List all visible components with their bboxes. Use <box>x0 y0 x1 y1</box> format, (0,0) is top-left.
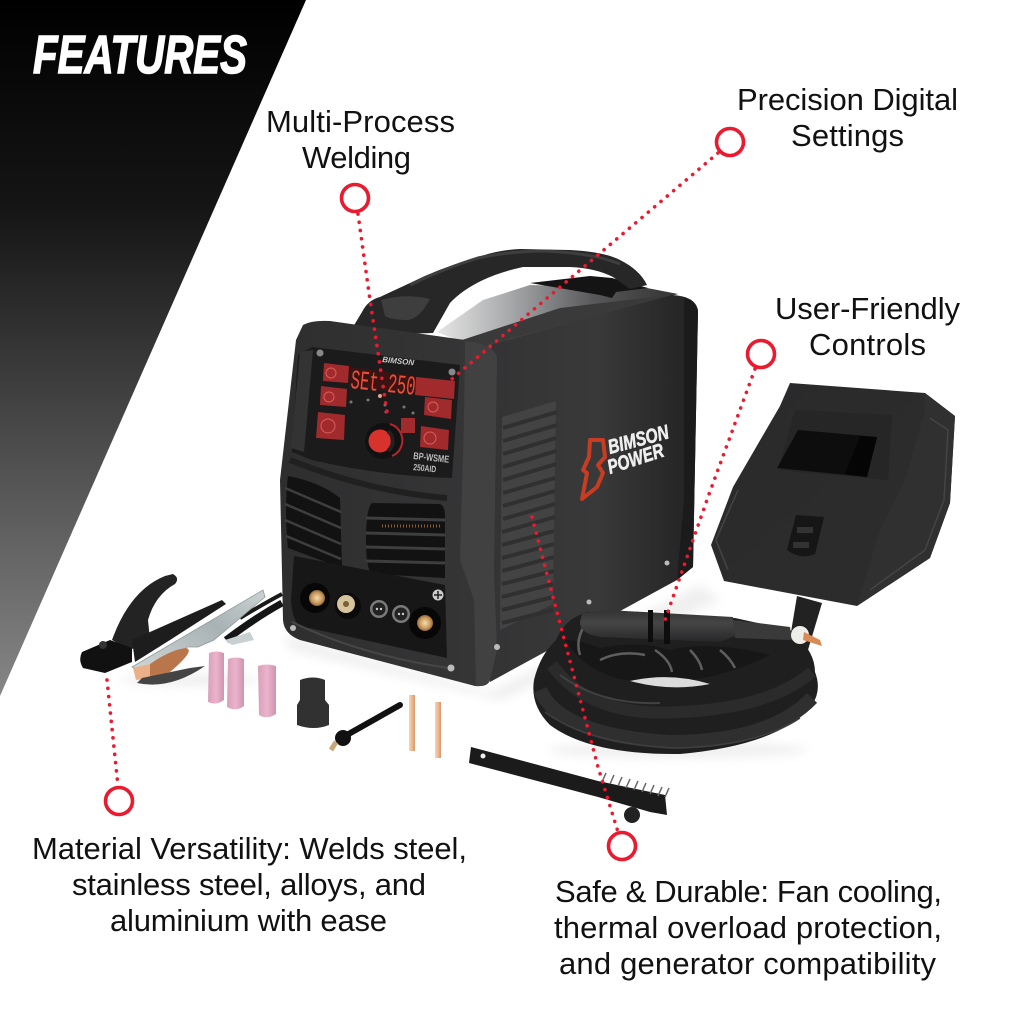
label: precision digital settings: Precision Digital <box>737 82 958 117</box>
model text <box>413 451 450 474</box>
marker: user controls <box>748 340 774 368</box>
label: multi-process welding: Multi-Process <box>266 104 455 139</box>
block icons <box>321 368 438 444</box>
marker: digital settings <box>716 128 744 156</box>
digital display <box>349 367 417 404</box>
copper collets <box>409 695 441 758</box>
helmet window <box>777 410 892 480</box>
model text: 250AID <box>413 462 437 474</box>
side panel <box>477 295 698 682</box>
rear clamp <box>530 276 648 298</box>
corner screws <box>290 560 670 672</box>
marker: multi-process <box>342 184 368 212</box>
floor shadows <box>120 585 808 758</box>
status leds <box>350 394 414 414</box>
welding machine <box>280 249 698 686</box>
label: safe and durable: thermal overload protection, <box>554 910 942 945</box>
carry handle <box>353 249 647 333</box>
marker: material versatility <box>106 788 132 814</box>
control panel <box>290 347 460 498</box>
helmet stand <box>788 596 822 660</box>
socket: gas <box>335 593 361 619</box>
ceramic nozzles <box>208 652 276 717</box>
callout markers <box>106 128 774 860</box>
panel brand: BIMSON <box>382 355 415 367</box>
panel screws <box>316 350 456 376</box>
leader: multi-process <box>358 214 387 412</box>
label: user-friendly controls: Controls <box>809 327 926 362</box>
label: material versatility: aluminium with ease <box>110 903 387 938</box>
front right bevel <box>460 341 497 686</box>
torch copper tip <box>803 632 822 646</box>
hose coil <box>533 612 818 754</box>
socket: torch <box>370 600 388 618</box>
socket: positive <box>409 607 441 639</box>
label: user-friendly controls <box>775 291 960 362</box>
adjustment knob <box>365 423 402 459</box>
hose sleeve <box>565 640 770 680</box>
top near edge <box>462 294 678 348</box>
electrode holder <box>80 574 226 673</box>
model text: BP-WSME <box>413 451 450 466</box>
red function blocks <box>316 363 455 450</box>
machine top surface <box>437 285 678 348</box>
brand logo on side: POWER <box>605 440 667 479</box>
leader: material versatility <box>107 680 118 786</box>
leader: safe durable <box>532 517 618 832</box>
wire brush <box>469 747 669 823</box>
title: FEATURES <box>33 25 247 85</box>
left vent <box>285 476 342 568</box>
helmet shell <box>711 383 955 606</box>
label: safe and durable: Safe & Durable: Fan cooling, <box>555 874 942 909</box>
helmet latch <box>787 515 824 556</box>
floor opening <box>630 677 710 687</box>
label: safe and durable <box>554 874 942 981</box>
label: user-friendly controls: User-Friendly <box>775 291 960 326</box>
brand logo on side <box>582 421 672 499</box>
socket: negative <box>300 583 330 613</box>
label: material versatility: stainless steel, alloys, and <box>72 867 426 902</box>
marker: safe durable <box>608 832 636 860</box>
digital display: SEt 250 <box>349 367 417 404</box>
corner banner <box>0 0 306 696</box>
collet body <box>297 678 329 728</box>
brand logo on side: BIMSON <box>606 421 672 459</box>
tig torch <box>580 610 822 646</box>
leader: user controls <box>665 369 755 620</box>
earth clamp <box>132 590 282 685</box>
label: material versatility: Material Versatility: Welds steel, <box>32 831 467 866</box>
label: safe and durable: and generator compatibility <box>559 946 936 981</box>
label: material versatility <box>32 831 467 938</box>
red menu button <box>401 418 415 433</box>
front casing <box>280 321 497 686</box>
leader lines <box>107 153 755 832</box>
leader: digital settings <box>446 153 718 384</box>
label: precision digital settings <box>737 82 958 153</box>
welding helmet <box>711 383 955 660</box>
side rear edge <box>677 298 698 580</box>
plus symbol <box>432 590 444 600</box>
label: precision digital settings: Settings <box>791 118 904 153</box>
socket: control <box>392 605 410 623</box>
middle vent <box>366 503 445 578</box>
output sockets panel <box>291 556 448 668</box>
label: multi-process welding: Welding <box>302 140 411 175</box>
torch ceramic ring <box>791 626 809 644</box>
label: multi-process welding <box>266 104 455 175</box>
back cap <box>331 705 400 750</box>
side ventilation <box>500 401 557 630</box>
